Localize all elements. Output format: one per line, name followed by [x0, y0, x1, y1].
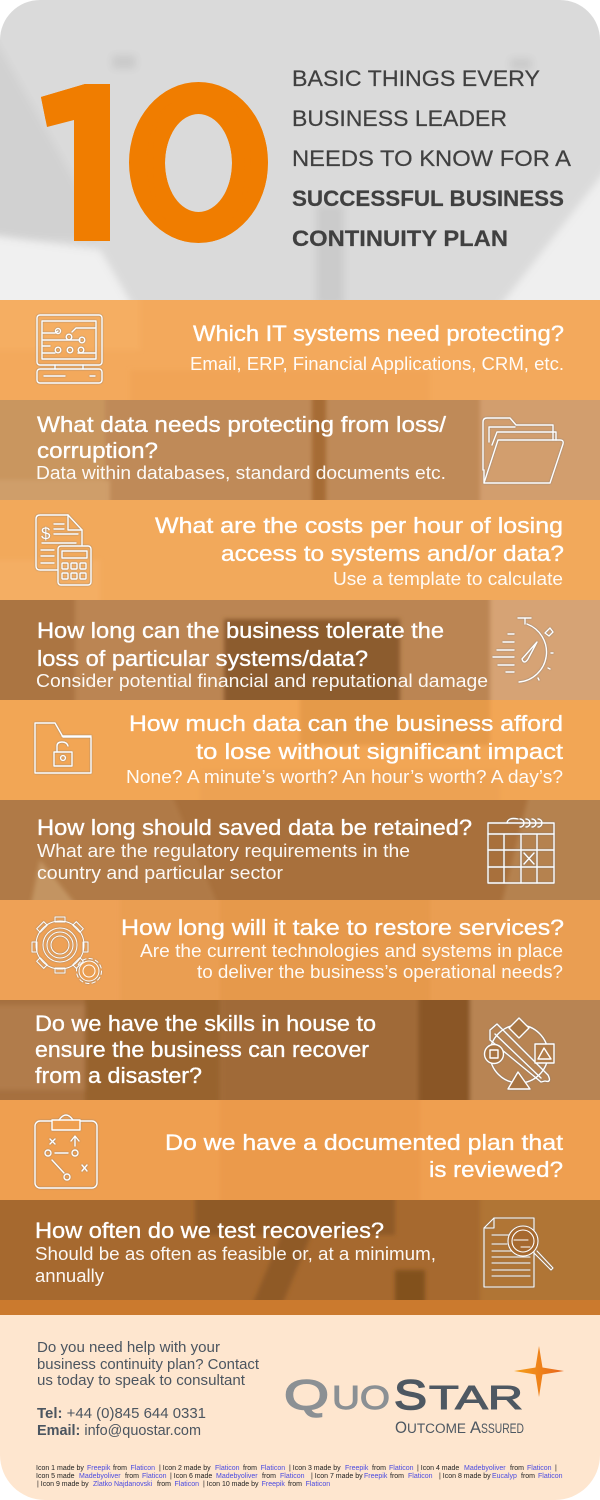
- title: BASIC THINGS EVERY: [292, 66, 540, 91]
- text: band 2 detail: Data within databases, standard documents etc.: [36, 463, 446, 483]
- text: icon credits: from: [521, 1473, 535, 1480]
- text: icon credits: Flaticon: [280, 1473, 305, 1480]
- text: icon credits: Flaticon: [261, 1465, 285, 1472]
- panel: band 10: [0, 1200, 600, 1300]
- text: band 4 detail: Consider potential financial and reputational damage: [36, 671, 488, 691]
- text: icon credits: from: [113, 1465, 127, 1472]
- heading: band 3: [155, 513, 564, 566]
- text: icon credits: Freepik: [262, 1481, 285, 1488]
- text: contact prompt: us today to speak to consultant: [37, 1373, 245, 1389]
- text: icon credits: Flaticon: [174, 1481, 199, 1488]
- panel: band 5: [0, 700, 600, 800]
- panel: band 3: [0, 500, 600, 610]
- text: icon credits: from: [157, 1481, 171, 1488]
- icon: open folder: [483, 418, 563, 483]
- text: icon credits: Eucalyp: [492, 1473, 517, 1480]
- text: icon credits: Icon 1 made by: [36, 1465, 84, 1472]
- text: band 3 detail: Use a template to calculate: [333, 569, 563, 589]
- text: icon credits: Madebyoliver: [79, 1473, 121, 1480]
- text: icon credits: Flaticon: [306, 1481, 330, 1488]
- logo: QuoStar: Q: [284, 1371, 329, 1418]
- icon: folder with padlock: [35, 723, 91, 773]
- panel: band 8: [0, 1000, 600, 1100]
- title: [292, 66, 571, 251]
- text: icon credits: | Icon 10 made by: [203, 1481, 259, 1488]
- heading: band 5: How much data can the business afford: [129, 711, 563, 736]
- text: band 10 detail: [35, 1244, 436, 1286]
- panel: band 2: [0, 400, 600, 500]
- background photo: office ceiling: [0, 0, 600, 310]
- panel: band 1: [0, 300, 600, 400]
- heading: band 8: [35, 1014, 376, 1084]
- icon: stopwatch: [493, 618, 553, 682]
- text: icon credits: Flaticon: [527, 1465, 552, 1472]
- text: band 6 detail: country and particular sector: [37, 863, 283, 883]
- text: icon credits: | Icon 4 made: [417, 1465, 459, 1472]
- panel: band 6: [0, 800, 600, 900]
- heading: band 2: corruption?: [37, 438, 158, 463]
- text: icon credits: | Icon 7 made by: [311, 1473, 363, 1480]
- icon: computer circuit: [37, 315, 102, 383]
- icon: gears: [32, 917, 102, 984]
- text: icon credits: | Icon 3 made by: [289, 1465, 341, 1472]
- text: icon credits: | Icon 8 made by: [439, 1473, 491, 1480]
- text: icon credits: Flaticon: [389, 1465, 414, 1472]
- heading: band 5: [129, 711, 564, 764]
- heading: band 7: How long will it take to restore services?: [121, 915, 564, 940]
- text: band 7 detail: to deliver the business’s operational needs?: [197, 962, 563, 982]
- logo: QuoStar: S: [394, 1371, 427, 1418]
- text: icon credits: from: [125, 1473, 139, 1480]
- heading: band 5: to lose without significant impact: [196, 739, 564, 764]
- text: icon credits: Madebyoliver: [464, 1465, 506, 1472]
- divider strip: [0, 1300, 600, 1315]
- text: band 6 detail: What are the regulatory requirements in the: [37, 841, 410, 861]
- icon: invoice and calculator: [36, 515, 91, 585]
- text: icon credits: | Icon 2 made by: [159, 1465, 211, 1472]
- text: icon credits: Flaticon: [538, 1473, 563, 1480]
- heading: band 4: [37, 618, 444, 671]
- icon: document with magnifier: [484, 1218, 553, 1287]
- logo: QuoStar: TAR: [429, 1379, 523, 1416]
- text: band 7 detail: Are the current technologies and systems in place: [140, 941, 563, 961]
- heading: band 4: How long can the business tolerate the: [37, 618, 444, 643]
- heading: band 2: What data needs protecting from loss/: [37, 412, 447, 437]
- text: icon credits: Flaticon: [130, 1465, 155, 1472]
- logo: QuoStar: SSURED: [481, 1421, 524, 1436]
- big number 10: [12, 24, 280, 292]
- text: contact details: Email: info@quostar.com: [37, 1423, 201, 1439]
- icon: calendar: [488, 818, 554, 883]
- icon: invoice and calculator: $: [41, 524, 51, 543]
- logo: QuoStar: UO: [332, 1379, 390, 1416]
- panel: band 4: [0, 600, 600, 700]
- text: band 5 detail: None? A minute’s worth? An hour’s worth? A day’s?: [126, 767, 563, 787]
- text: contact details: Tel: +44 (0)845 644 0331: [37, 1406, 206, 1422]
- text: icon credits: from: [243, 1465, 257, 1472]
- big number 10: 1: [12, 24, 172, 292]
- logo: QuoStar: UTCOME: [407, 1421, 466, 1436]
- title: SUCCESSFUL BUSINESS: [292, 186, 564, 211]
- text: band 10 detail: Should be as often as feasible or, at a minimum,: [35, 1244, 436, 1264]
- icon: clipboard plan: [35, 1115, 97, 1188]
- text: icon credits: |: [555, 1465, 557, 1472]
- text: icon credits: Madebyoliver: [216, 1473, 258, 1480]
- text: contact details: [37, 1406, 206, 1439]
- text: icon credits: Freepik: [364, 1473, 388, 1480]
- heading: band 9: [166, 1134, 564, 1178]
- heading: band 9: Do we have a documented plan that: [165, 1130, 564, 1155]
- heading: band 4: loss of particular systems/data?: [37, 646, 368, 671]
- heading: band 3: What are the costs per hour of losing: [155, 513, 563, 538]
- text: icon credits: Flaticon: [408, 1473, 433, 1480]
- heading: band 8: ensure the business can recover: [35, 1037, 370, 1062]
- logo: QuoStar: [284, 1346, 564, 1437]
- text: icon credits: from: [390, 1473, 404, 1480]
- heading: band 10: How often do we test recoveries?: [35, 1218, 384, 1243]
- text: icon credits: from: [510, 1465, 524, 1472]
- text: icon credits: Freepik: [87, 1465, 111, 1472]
- title: NEEDS TO KNOW FOR A: [292, 146, 571, 171]
- text: icon credits: | Icon 6 made: [170, 1473, 212, 1480]
- text: band 10 detail: annually: [35, 1266, 104, 1286]
- text: band 1 detail: Email, ERP, Financial Applications, CRM, etc.: [190, 354, 564, 374]
- panel: band 9: [0, 1100, 600, 1200]
- text: icon credits: | Icon 9 made by: [37, 1481, 89, 1488]
- text: icon credits: Zlatko Najdanovski: [93, 1481, 153, 1488]
- text: band 6 detail: [37, 841, 410, 883]
- text: icon credits: Icon 5 made: [36, 1473, 75, 1480]
- text: icon credits: from: [288, 1481, 302, 1488]
- text: icon credits: from: [372, 1465, 386, 1472]
- title: CONTINUITY PLAN: [292, 226, 508, 251]
- title: BUSINESS LEADER: [292, 106, 507, 131]
- panel: footer: [0, 1315, 600, 1500]
- heading: band 3: access to systems and/or data?: [221, 541, 564, 566]
- text: icon credits: Flaticon: [215, 1465, 240, 1472]
- text: icon credits: [36, 1465, 563, 1488]
- icon: pencil and shapes: [484, 1018, 554, 1089]
- heading: band 1: Which IT systems need protecting?: [193, 321, 564, 346]
- panel: band 7: [0, 900, 600, 1000]
- heading: band 8: from a disaster?: [35, 1063, 202, 1088]
- logo: QuoStar: O: [395, 1418, 407, 1437]
- text: contact prompt: business continuity plan? Contact: [37, 1357, 259, 1373]
- heading: band 6: How long should saved data be retained?: [37, 815, 472, 840]
- heading: band 9: is reviewed?: [429, 1157, 563, 1182]
- text: contact prompt: [37, 1340, 259, 1389]
- text: band 7 detail: [140, 941, 563, 982]
- big number 10: 0: [119, 39, 280, 287]
- heading: band 8: Do we have the skills in house to: [35, 1011, 376, 1036]
- text: icon credits: Freepik: [345, 1465, 369, 1472]
- heading: band 2: [37, 412, 447, 463]
- text: icon credits: Flaticon: [142, 1473, 167, 1480]
- logo: QuoStar: A: [470, 1418, 482, 1437]
- text: icon credits: from: [262, 1473, 276, 1480]
- text: contact prompt: Do you need help with your: [37, 1340, 220, 1356]
